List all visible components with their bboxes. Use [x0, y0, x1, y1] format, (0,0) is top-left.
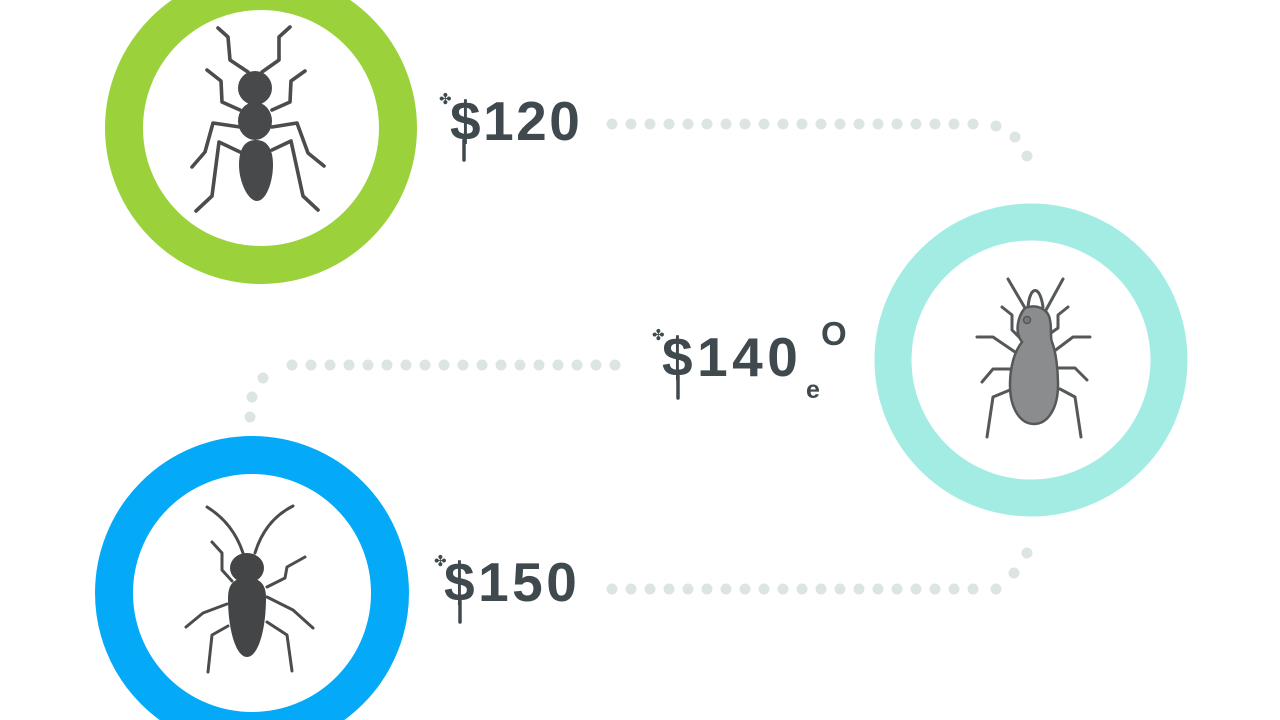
- price: $120: ✤: [439, 90, 452, 108]
- ring: teal: [893, 222, 1169, 498]
- ring: blue: [114, 455, 390, 720]
- price: $140 with stray glyphs: O: [821, 315, 847, 352]
- icon: cockroach: [186, 506, 313, 672]
- price: $140 with stray glyphs: e: [806, 376, 820, 404]
- price: $140 with stray glyphs: $140: [662, 326, 802, 388]
- price: $120: $120: [450, 90, 582, 152]
- connector: dotted line from beetle price to cockroach ring: [250, 365, 615, 417]
- price: $140 with stray glyphs: [652, 315, 847, 404]
- icon: ant: [192, 27, 324, 211]
- ring: green: [124, 0, 398, 265]
- price: $150: $150: [444, 551, 580, 613]
- icon: beetle: [977, 279, 1090, 437]
- price: $140 with stray glyphs: ✤: [652, 326, 665, 344]
- price: $150: ✤: [434, 552, 447, 570]
- connector: dotted line from ant price to beetle ring: [612, 124, 1027, 156]
- connector: dotted line from cockroach price to beetle ring: [612, 553, 1027, 589]
